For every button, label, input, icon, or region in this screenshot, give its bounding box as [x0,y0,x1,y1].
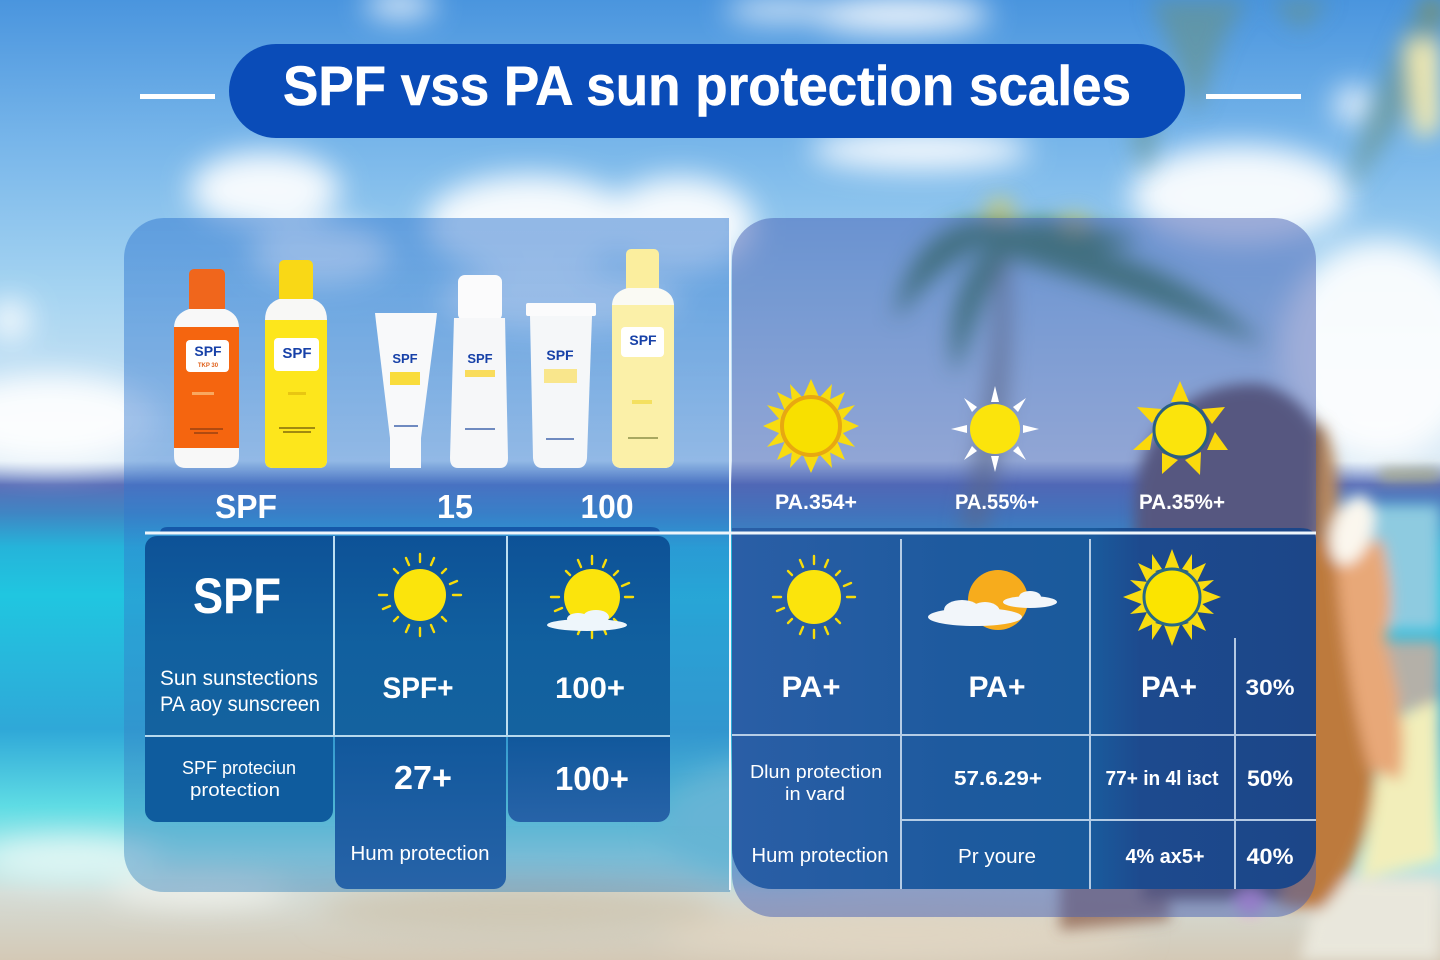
PA scale labels: PA.35%+ [1139,491,1225,514]
icon: white jar tube [526,303,596,468]
cell: SPF heading: PA aоy sunscreen [160,693,320,716]
icon: sun with cloud [547,556,633,638]
cell: SPF protection: SPF prоtеciun [182,758,296,778]
icon: white tube [375,313,437,468]
PA row labels [782,671,1197,704]
PA row text: Dlun protection [750,762,882,782]
cell: 100+ second [508,737,670,822]
icon: sun behind clouds [928,570,1057,630]
percent column: 40% [1246,844,1294,869]
cell: SPF protection: protection [190,780,280,800]
SPF scale labels [215,488,634,525]
PA row text: Hum protection [752,845,888,867]
title pill [229,44,1185,138]
icon: spiky sun [763,379,859,473]
SPF scale labels: SPF [215,488,277,525]
icon: sun [379,554,461,636]
SPF table [145,536,670,889]
icon: white pump bottle [450,275,508,468]
percent column: 30% [1246,675,1294,700]
title banner [140,44,1301,138]
icon: white ray sun [951,386,1039,472]
cell: 100+: 100+ [555,672,625,705]
PA row text: Pr youre [958,846,1036,868]
cell: 100+ [508,536,670,735]
percent column: 50% [1247,766,1293,791]
SPF scale labels: 15 [437,488,473,525]
icon row: PA suns [763,379,1228,475]
icon: spiked sun [1123,549,1221,646]
PA row text: 4% ax5+ [1126,846,1204,868]
sunscreen bottles [174,249,674,468]
icon: yellow bottle [265,260,327,468]
panel: PA [732,218,1316,917]
cell: SPF heading: Sun sunstections [160,667,318,690]
PA table [732,528,1316,889]
PA row labels: PA+ [1141,671,1197,704]
icon: orange bottle: TKP 30 [198,363,219,369]
cell: SPF protection [145,737,333,822]
PA row text: 77+ in 4l ізct [1106,768,1219,790]
icon: orange bottle [174,269,239,468]
PA scale labels: PA.55%+ [955,491,1039,514]
PA row text [750,762,1219,868]
title text: SPF vss PA sun protection scales [283,54,1131,117]
cell: SPF+: SPF+ [382,672,454,705]
background palm [895,200,1265,530]
PA scale labels [775,491,1225,514]
background woman [1060,384,1440,960]
PA scale labels: PA.354+ [775,491,857,514]
cell: SPF+ [335,536,506,735]
PA row text: 57.6.29+ [954,768,1042,790]
PA row labels: PA+ [782,671,840,704]
cell: 100+ second: 100+ [555,760,629,797]
icon: pale yellow bottle [612,249,674,468]
icon: star sun [1133,381,1228,475]
icon: yellow bottle: SPF [282,345,312,362]
icon: white tube: SPF [392,351,418,366]
SPF scale labels: 100 [580,488,634,525]
PA row labels: PA+ [968,671,1026,704]
icon: sun with rays [773,556,855,638]
PA row text: in vaɾd [785,784,845,804]
cell: 27+ and hum protection [335,737,506,889]
cell: 27+ and hum protection: Hum protection [350,843,490,865]
icon: white jar tube: SPF [546,347,574,363]
icon: orange bottle: SPF [194,343,222,359]
panel: SPF [124,218,730,892]
icon: white pump bottle: SPF [467,351,493,366]
cell: SPF heading: SPF [193,568,281,624]
percent column [1246,675,1294,869]
cell: SPF heading [145,536,333,735]
icon: pale yellow bottle: SPF [629,332,657,348]
cell: 27+ and hum protection: 27+ [394,759,452,796]
